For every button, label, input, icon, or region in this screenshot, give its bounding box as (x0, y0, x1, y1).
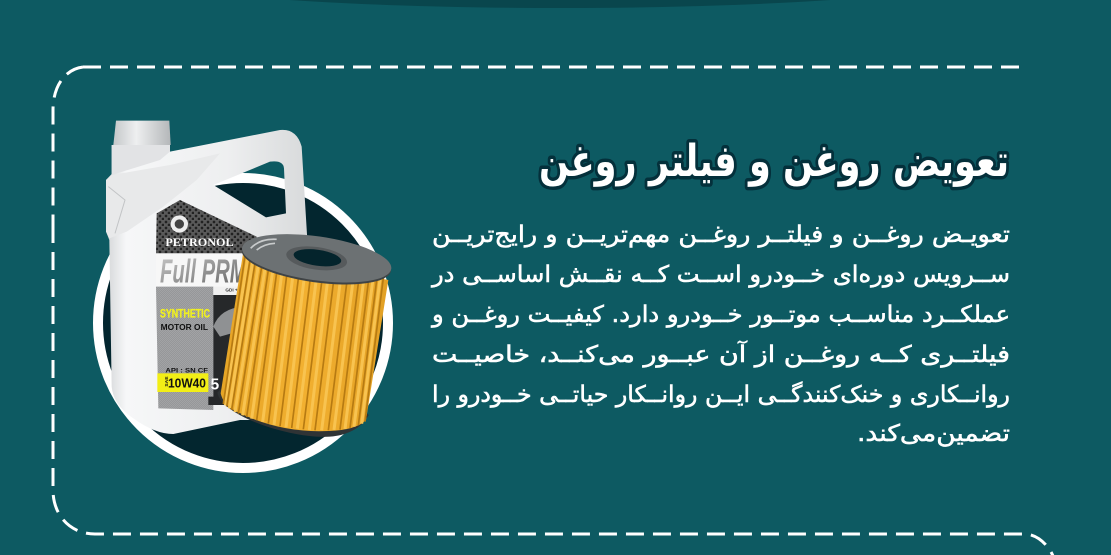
body text: تعویـض روغــن و فیلتــر روغــن مهم‌تریــن و رایج‌تریــن (432, 222, 1010, 248)
title: تعویض روغن و فیلتر روغن (539, 136, 1009, 187)
body text: روانــکاری و خنک‌کنندگــی ایــن روانــکار حیاتــی خــودرو را (432, 381, 1010, 408)
bottle label: GDI + (225, 288, 238, 293)
bottle label: MOTOR OIL (161, 323, 208, 332)
circle badge (98, 178, 388, 468)
bottle label: Full PRM (160, 254, 247, 291)
oil filter (217, 226, 394, 437)
body text: فیلتــری کــه روغــن از آن عبــور می‌کنــد، خاصیــت (432, 340, 1010, 368)
body text: عملکــرد مناســب موتــور خــودرو دارد. کیفیــت روغــن و (431, 302, 1010, 328)
filter top cap (239, 226, 394, 293)
bottle cap (113, 121, 171, 145)
bottle label (156, 200, 257, 410)
dashed frame (53, 67, 1053, 555)
oil bottle (106, 121, 307, 434)
body text: تضمین‌می‌کند. (857, 421, 1010, 447)
bottle label: SAE (164, 376, 170, 387)
bottle label: 10W40 (168, 376, 206, 390)
filter pleats (225, 258, 380, 430)
body text: ســرویس دوره‌ای خــودرو اســت کــه نقــش اساســی در (431, 262, 1010, 288)
bottle label: PETRONOL (165, 235, 234, 249)
bottle label: SYNTHETIC (160, 306, 210, 320)
top dark ellipse (140, 0, 980, 8)
bottle label: API : SN CF (165, 367, 208, 374)
product image: oil bottle and filter (106, 121, 394, 437)
bottle label: 5 (211, 376, 220, 393)
body text (431, 222, 1010, 447)
